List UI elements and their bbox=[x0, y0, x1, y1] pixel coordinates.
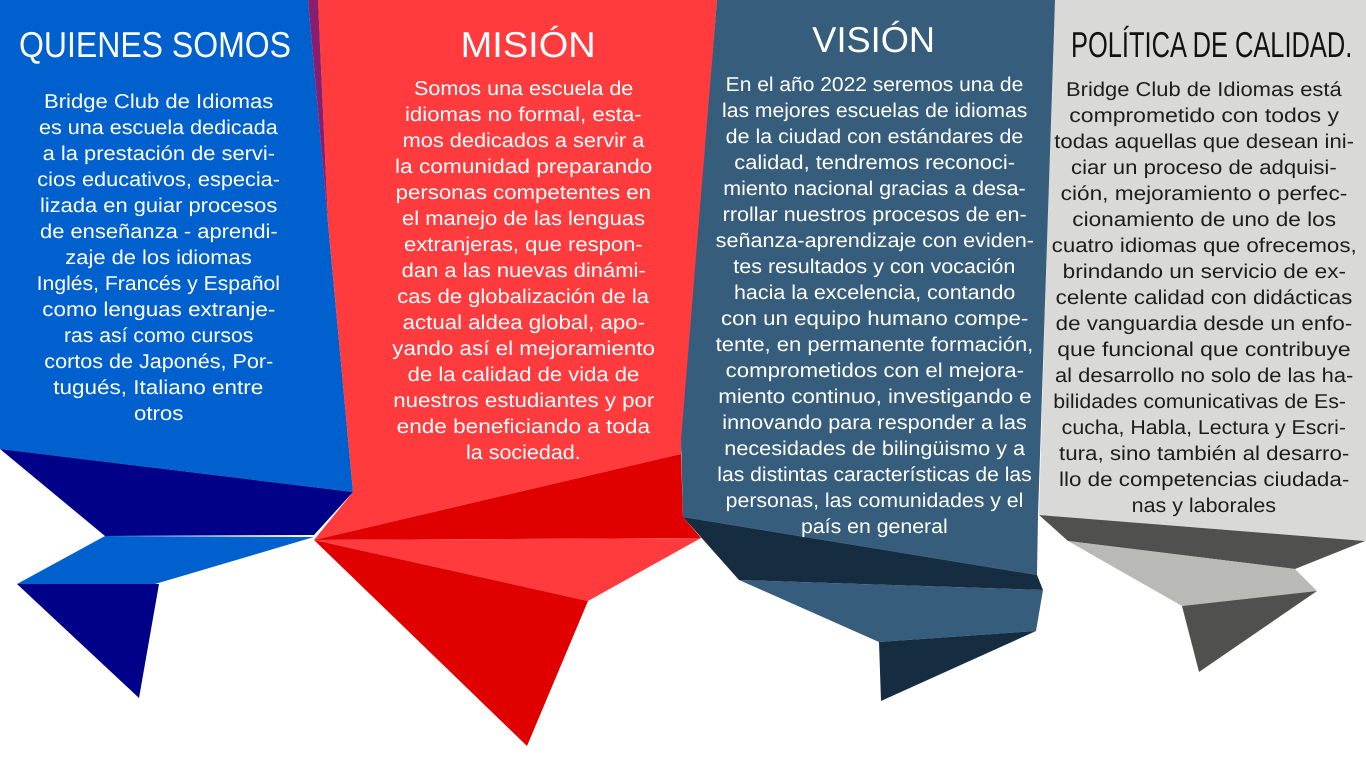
text block: visión: personas, las comunidades y el bbox=[726, 490, 1023, 512]
ribbon fold: mid grey bbox=[1068, 541, 1317, 606]
text block: política de calidad bbox=[1052, 79, 1357, 517]
text block: política de calidad: de vanguardia desde un enfo- bbox=[1056, 313, 1352, 335]
text block: quienes somos bbox=[37, 91, 280, 425]
ribbon fold: navy upper bbox=[0, 449, 353, 536]
text block: quienes somos: es una escuela dedicada bbox=[39, 117, 279, 139]
text block: política de calidad: Bridge Club de Idiomas está bbox=[1066, 79, 1343, 101]
text block: visión: comprometidos con el mejora- bbox=[726, 360, 1024, 382]
text block: visión: las distintas características de las bbox=[717, 464, 1032, 486]
text block: visión: de la ciudad con estándares de bbox=[726, 126, 1023, 148]
text block: visión: necesidades de bilingüismo y a bbox=[724, 438, 1026, 460]
text block: visión: país en general bbox=[801, 516, 948, 538]
text block: misión: personas competentes en bbox=[396, 182, 651, 204]
panel: misión bbox=[308, 0, 717, 746]
text block: quienes somos: ras así como cursos bbox=[64, 325, 253, 347]
panel: política de calidad bbox=[1039, 0, 1366, 672]
ribbon fold: blue middle bbox=[17, 536, 314, 584]
text block: quienes somos: Bridge Club de Idiomas bbox=[44, 91, 273, 113]
text block: política de calidad: llo de competencias ciudada- bbox=[1059, 469, 1349, 491]
text block: misión: mos dedicados a servir a bbox=[403, 130, 645, 152]
text block: política de calidad: tura, sino también al desarro- bbox=[1059, 443, 1349, 465]
text block: política de calidad: que funcional que contribuye bbox=[1057, 339, 1351, 361]
banner: slate main bbox=[681, 0, 1055, 575]
text block: misión: nuestros estudiantes y por bbox=[393, 390, 655, 412]
text block: visión: En el año 2022 seremos una de bbox=[726, 74, 1023, 96]
text block: misión: dan a las nuevas dinámi- bbox=[402, 260, 646, 282]
text block: visión: miento nacional gracias a desa- bbox=[723, 178, 1026, 200]
text block: política de calidad: al desarrollo no solo de las ha- bbox=[1055, 365, 1353, 387]
text block: quienes somos: de enseñanza - aprendi- bbox=[40, 221, 278, 243]
text block: misión: la comunidad preparando bbox=[395, 156, 652, 178]
text block: quienes somos: a la prestación de servi- bbox=[43, 143, 275, 165]
text block: quienes somos: cios educativos, especia- bbox=[37, 169, 280, 191]
heading: visión: VISIÓN bbox=[812, 19, 935, 60]
text block: visión: hacia la excelencia, contando bbox=[734, 282, 1015, 304]
fold strip: purple bbox=[308, 0, 328, 223]
text block: quienes somos: Inglés, Francés y Español bbox=[37, 273, 280, 295]
text block: política de calidad: cuatro idiomas que ofrecemos, bbox=[1052, 235, 1357, 257]
heading: quienes somos: QUIENES SOMOS bbox=[19, 24, 291, 65]
text block: política de calidad: todas aquellas que desean ini- bbox=[1054, 131, 1354, 153]
heading: misión: MISIÓN bbox=[461, 24, 596, 65]
ribbon tip: dark grey bbox=[1182, 591, 1317, 672]
text block: quienes somos: como lenguas extranje- bbox=[42, 299, 275, 321]
banner: blue main bbox=[0, 0, 353, 492]
text block: política de calidad: comprometido con todos y bbox=[1069, 105, 1339, 127]
text block: misión: idiomas no formal, esta- bbox=[405, 104, 642, 126]
text block: política de calidad: ción, mejoramiento o perfec- bbox=[1061, 183, 1347, 205]
text block: visión: tente, en permanente formación, bbox=[716, 334, 1033, 356]
text block: visión: las mejores escuelas de idiomas bbox=[722, 100, 1027, 122]
text block: política de calidad: bilidades comunicativas de Es- bbox=[1053, 391, 1346, 413]
text block: visión: rrollar nuestros procesos de en- bbox=[723, 204, 1027, 226]
text block: misión: el manejo de las lenguas bbox=[402, 208, 645, 230]
ribbon fold: dark grey upper bbox=[1039, 515, 1365, 569]
text block: visión: señanza-aprendizaje con eviden- bbox=[716, 230, 1034, 252]
ribbon fold: dark red upper bbox=[314, 454, 701, 540]
text block: misión: la sociedad. bbox=[466, 442, 581, 464]
text block: visión: innovando para responder a las bbox=[722, 412, 1027, 434]
text block: política de calidad: celente calidad con didácticas bbox=[1056, 287, 1352, 309]
text block: visión: tes resultados y con vocación bbox=[733, 256, 1015, 278]
panel: quienes somos bbox=[0, 0, 353, 698]
text block: misión: actual aldea global, apo- bbox=[403, 312, 645, 334]
text block: visión: calidad, tendremos reconoci- bbox=[734, 152, 1015, 174]
text block: quienes somos: cortos de Japonés, Por- bbox=[44, 351, 273, 373]
text block: visión bbox=[716, 74, 1034, 538]
ribbon fold: navy slate upper bbox=[683, 517, 1043, 590]
text block: misión: extranjeras, que respon- bbox=[404, 234, 643, 256]
text block: misión: yando así el mejoramiento bbox=[392, 338, 655, 360]
text block: misión: cas de globalización de la bbox=[397, 286, 650, 308]
text block: misión bbox=[392, 78, 655, 464]
text block: política de calidad: cionamiento de uno de los bbox=[1072, 209, 1336, 231]
text block: política de calidad: cucha, Habla, Lectura y Escri- bbox=[1062, 417, 1346, 439]
text block: política de calidad: ciar un proceso de adquisi- bbox=[1071, 157, 1337, 179]
ribbon fold: red middle bbox=[314, 538, 701, 601]
text block: quienes somos: zaje de los idiomas bbox=[65, 247, 252, 269]
banner: red main bbox=[314, 0, 717, 540]
banner: light grey main bbox=[1039, 0, 1366, 541]
ribbon fold: slate middle bbox=[739, 580, 1043, 642]
text block: quienes somos: tugués, Italiano entre bbox=[53, 377, 263, 399]
text block: misión: ende beneficiando a toda bbox=[397, 416, 651, 438]
text block: quienes somos: otros bbox=[134, 403, 183, 425]
panel: visión bbox=[681, 0, 1055, 701]
ribbon tip: navy slate bbox=[879, 631, 1036, 701]
text block: visión: con un equipo humano compe- bbox=[721, 308, 1028, 330]
text block: política de calidad: brindando un servicio de ex- bbox=[1063, 261, 1346, 283]
text block: misión: de la calidad de vida de bbox=[408, 364, 639, 386]
text block: quienes somos: lizada en guiar procesos bbox=[40, 195, 277, 217]
ribbon tip: dark red bbox=[314, 540, 588, 746]
ribbon tip: navy bbox=[17, 584, 159, 698]
text block: visión: miento continuo, investigando e bbox=[718, 386, 1032, 408]
text block: misión: Somos una escuela de bbox=[414, 78, 633, 100]
text block: política de calidad: nas y laborales bbox=[1132, 495, 1276, 517]
